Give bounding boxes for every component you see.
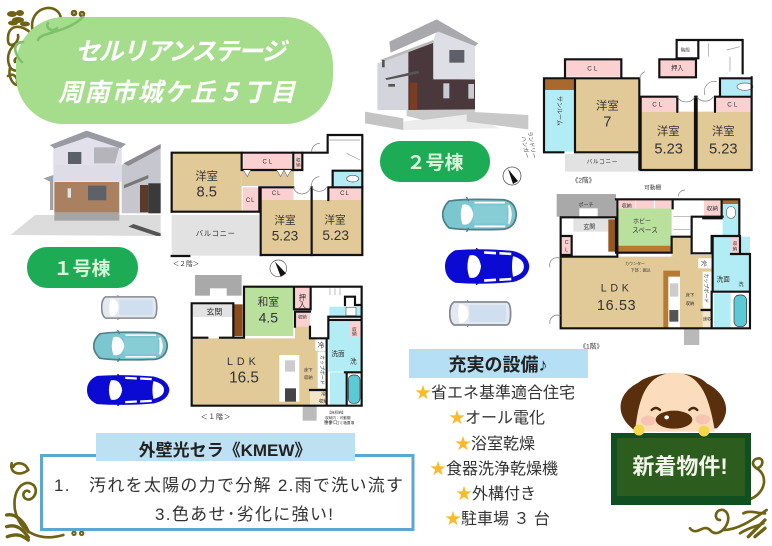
room labels: 収納内：可動棚 <box>325 415 351 420</box>
room labels <box>555 46 739 185</box>
room labels: 押 <box>299 293 306 302</box>
panel: features list <box>409 349 588 528</box>
room labels: 冷 <box>321 391 326 398</box>
title line 1: セルリアンステージ <box>75 38 290 66</box>
room labels: 玄関 <box>206 306 222 316</box>
room labels: CL <box>587 66 599 73</box>
room labels: CL <box>246 198 255 204</box>
room labels: 入 <box>299 300 307 309</box>
room labels: 収 <box>296 157 301 163</box>
icon: puppy face <box>621 373 726 432</box>
title line 2: 周南市城ケ丘５丁目 <box>58 79 297 107</box>
room labels: 洋室 <box>195 169 218 183</box>
room labels: 収納 <box>686 300 695 307</box>
note: laundry hanger: ランドリー <box>526 131 538 159</box>
cars: building 1 parking <box>87 295 169 406</box>
floor plan: building 1, 1st floor <box>192 275 362 425</box>
note: back door: 勝手口 <box>324 419 338 426</box>
car: blue <box>445 248 529 285</box>
room labels: 16.5 <box>229 369 259 386</box>
room labels: 5.23 <box>272 229 298 244</box>
features heading <box>409 349 588 378</box>
room labels: 洗面 <box>331 349 345 358</box>
floor plan: building 1, 2nd floor <box>172 135 362 277</box>
callout text: 3.色あせ･劣化に強い! <box>155 505 333 524</box>
room labels <box>565 183 744 350</box>
room labels: 納 <box>352 331 357 338</box>
room labels: 和室 <box>258 297 279 309</box>
room labels: 収納 <box>622 203 632 210</box>
room labels: 洗 <box>350 356 357 365</box>
room labels: CL <box>727 102 739 109</box>
label: building 1: １号棟 <box>53 258 111 280</box>
building 1 exterior illustration <box>11 131 161 236</box>
callout heading: 外壁光セラ《KMEW》 <box>139 441 311 460</box>
room labels: 玄関 <box>583 223 595 231</box>
ornament: top-left flourish <box>7 8 84 85</box>
cars: building 2 parking <box>443 197 529 327</box>
panel: exterior wall feature <box>42 433 413 530</box>
compass <box>270 260 287 277</box>
room labels: 収納 <box>707 205 718 213</box>
callout text: 1. 汚れを太陽の力で分解 2.雨で洗い流す <box>54 476 403 495</box>
room labels: 洋室 <box>274 214 296 227</box>
features items: ★駐車場 ３ 台 <box>445 510 550 528</box>
room labels: CL <box>262 159 274 165</box>
callout box <box>42 456 413 530</box>
room labels: 納 <box>296 162 301 169</box>
room labels: C <box>565 240 569 246</box>
room labels: 収納 <box>298 313 307 320</box>
room labels: ＜１階＞ <box>201 412 231 421</box>
room labels: 洗面 <box>717 275 730 284</box>
room labels: ＜２階＞ <box>173 259 199 268</box>
sign: new listing: 新着物件! <box>632 454 728 479</box>
room labels: 16.53 <box>597 298 636 314</box>
callout heading <box>96 433 355 461</box>
room labels: 5.23 <box>709 141 738 157</box>
room labels: 下部：掘込 <box>631 267 651 273</box>
label: building 2: ２号棟 <box>406 152 464 174</box>
room labels: L <box>565 248 568 254</box>
sign: new listing <box>611 433 751 505</box>
room labels: ホビー <box>633 217 651 225</box>
room labels: LDK <box>601 283 633 295</box>
room labels: 7 <box>603 115 611 131</box>
icon: puppy paws <box>634 424 710 436</box>
label: building 2 <box>380 141 490 182</box>
room labels: 床下 <box>304 368 313 374</box>
features items: ★浴室乾燥 <box>455 435 535 453</box>
floor plan: building 2, 2nd floor <box>544 40 753 185</box>
room labels: 冷 <box>701 260 707 268</box>
room labels: 冷 <box>318 341 325 350</box>
features items: ★オール電化 <box>449 409 545 427</box>
features items: ★食器洗浄乾燥機 <box>430 460 558 478</box>
room labels: 可動棚 <box>644 183 661 191</box>
room labels: 床収 <box>703 317 712 323</box>
room labels: 洋室 <box>324 213 346 226</box>
room labels: カウンター <box>625 260 645 266</box>
features items <box>415 384 575 528</box>
room labels: 押入 <box>671 63 684 72</box>
room labels: 収納 <box>319 397 328 404</box>
room labels: 下部：ゴミ箱置場 <box>325 420 355 425</box>
room labels: スペース <box>632 227 658 235</box>
room labels: 《1階》 <box>579 341 603 350</box>
room labels: 洋室 <box>657 124 680 138</box>
room labels <box>201 293 357 425</box>
room labels: 洗 <box>738 280 744 288</box>
ornament: bottom-left flourish <box>7 463 83 540</box>
title banner <box>15 17 333 124</box>
building 2 exterior illustration <box>365 19 528 130</box>
car: grey <box>450 300 511 327</box>
car: teal <box>94 330 167 362</box>
room labels: LDK <box>227 356 260 368</box>
features items: ★外構付き <box>456 485 536 503</box>
room labels: 収 <box>352 327 357 333</box>
room labels: 5.23 <box>322 228 349 243</box>
features items: ★省エネ基準適合住宅 <box>415 384 575 402</box>
car: grey <box>102 295 157 320</box>
floor plan: building 2, 1st floor <box>550 183 750 350</box>
room labels: 納 <box>733 246 738 253</box>
car: blue <box>87 374 169 406</box>
features heading: 充実の設備♪ <box>448 355 548 375</box>
note: laundry hanger <box>519 131 538 160</box>
room labels: 洋室 <box>596 98 619 112</box>
note: laundry hanger: ハンガー <box>520 136 531 159</box>
room labels: 収 <box>733 241 738 247</box>
room labels: 床下 <box>686 293 695 299</box>
room labels: CL <box>652 102 664 109</box>
room labels <box>173 157 350 268</box>
room labels: 階段 <box>681 46 690 53</box>
room labels: 《2階》 <box>572 176 595 185</box>
room labels: サンルーム <box>555 96 562 126</box>
room labels: カップボード <box>319 355 326 385</box>
room labels: 8.5 <box>196 185 217 201</box>
ornament: bottom-right flourish <box>690 458 767 537</box>
callout text <box>54 476 403 524</box>
room labels: 洋室 <box>712 124 735 138</box>
room labels: バルコニー <box>587 158 618 165</box>
room labels: 【床収納】 <box>327 410 346 415</box>
room labels: CL <box>272 191 281 197</box>
room labels: 5.23 <box>654 141 683 157</box>
room labels: バルコニー <box>196 229 236 238</box>
label: building 1 <box>27 247 138 288</box>
room labels: 4.5 <box>259 310 278 326</box>
room labels: ポーチ <box>579 202 593 209</box>
compass: building 2 <box>503 167 521 185</box>
room labels: 収納 <box>304 374 313 381</box>
car: teal <box>443 197 516 232</box>
room labels: CL <box>340 191 350 197</box>
room labels: カップボード <box>703 273 710 303</box>
